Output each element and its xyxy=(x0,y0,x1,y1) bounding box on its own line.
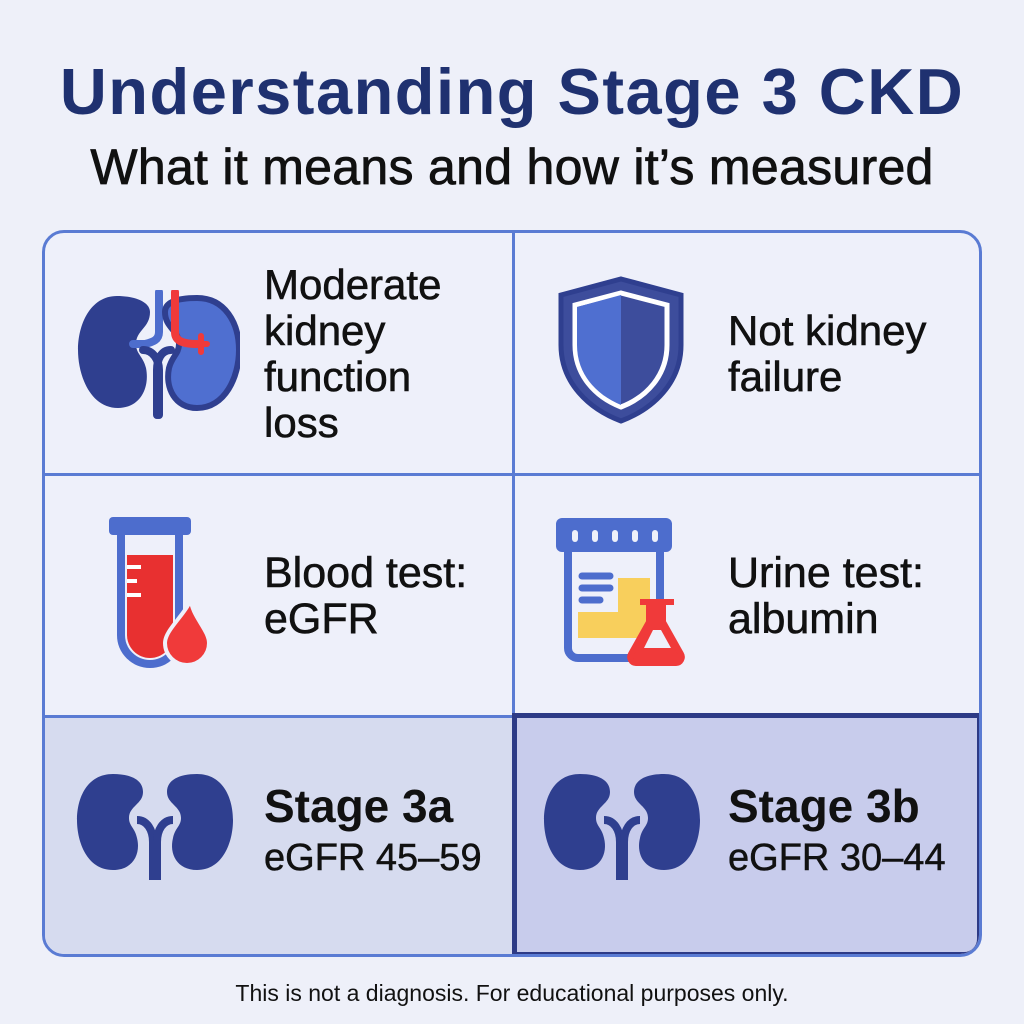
icon: kidneys stage 3b xyxy=(544,774,700,880)
text: moderate kidney function loss: function xyxy=(264,353,411,400)
grid panel xyxy=(42,230,982,957)
text: blood test eGFR: Blood test: xyxy=(264,549,467,597)
text: moderate kidney function loss: loss xyxy=(264,399,339,446)
text: moderate kidney function loss: kidney xyxy=(264,307,385,354)
text: stage 3a: eGFR 45–59 xyxy=(264,837,482,879)
text: blood test eGFR xyxy=(264,549,467,643)
text: not kidney failure: Not kidney xyxy=(728,307,926,354)
text: urine test albumin xyxy=(728,549,924,643)
cell: stage 3b highlighted xyxy=(512,713,982,957)
icon: shield xyxy=(558,276,684,424)
footer disclaimer: This is not a diagnosis. For educational purposes only. xyxy=(235,980,789,1006)
text: not kidney failure xyxy=(728,307,927,400)
text: blood test eGFR: eGFR xyxy=(264,595,379,643)
icon: kidneys with vessels xyxy=(78,290,240,419)
text: moderate kidney function loss: Moderate xyxy=(264,261,441,308)
subtitle: What it means and how it’s measured xyxy=(90,139,934,195)
icon: kidneys stage 3a xyxy=(76,774,233,880)
text: not kidney failure: failure xyxy=(728,353,842,400)
text: stage 3b: Stage 3b xyxy=(728,780,920,832)
icon: blood test tube xyxy=(109,517,207,668)
text: stage 3b: eGFR 30–44 xyxy=(728,837,946,879)
dividers xyxy=(512,233,515,960)
text: urine test albumin: albumin xyxy=(728,595,879,643)
text: urine test albumin: Urine test: xyxy=(728,549,924,597)
text: moderate kidney function loss xyxy=(264,261,441,446)
text: stage 3a: Stage 3a xyxy=(264,780,453,832)
text: stage 3a xyxy=(264,780,482,879)
text: stage 3b xyxy=(728,780,946,879)
icon: urine cup with flask xyxy=(556,518,685,666)
title: Understanding Stage 3 CKD xyxy=(60,55,964,128)
cell: stage 3a background xyxy=(45,717,515,960)
